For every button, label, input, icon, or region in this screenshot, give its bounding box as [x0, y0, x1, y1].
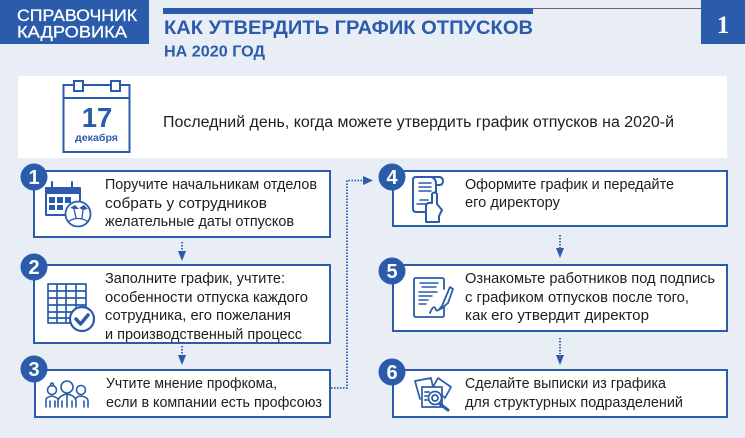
icon: calendar 17 December: декабря: [75, 132, 118, 144]
arrow 4 to 5: [556, 235, 564, 258]
brand block: КАДРОВИКА: [17, 22, 128, 42]
brand block: СПРАВОЧНИК: [17, 6, 137, 25]
step 6: [378, 358, 727, 417]
page number: [701, 0, 745, 44]
number 6: [378, 358, 406, 386]
icon: document with pen: [414, 278, 453, 317]
number 5: [378, 258, 406, 284]
number 2: 2: [28, 257, 40, 279]
step 5 text: как его утвердит директор: [465, 308, 649, 324]
title rule: [163, 8, 701, 14]
step 3 text: Учтите мнение профкома,: [106, 376, 277, 392]
number 4: 4: [386, 167, 398, 189]
step 1 text: собрать у сотрудников: [105, 196, 267, 212]
icon: documents with magnifier: [415, 378, 451, 410]
step 1 text: желательные даты отпусков: [105, 214, 294, 230]
step 1 text: [105, 177, 317, 230]
step 1 text: Поручите начальникам отделов: [105, 177, 317, 193]
arrow 5 to 6: [556, 338, 564, 365]
step 3: [20, 356, 330, 417]
step 4: [378, 164, 727, 226]
icon: calendar with island: [45, 182, 90, 226]
icon: calendar 17 December: 17: [82, 102, 112, 133]
step 5: [378, 258, 727, 331]
step 5 text: Ознакомьте работников под подпись: [465, 271, 715, 287]
number 3: 3: [28, 359, 40, 381]
icon: three people: [46, 381, 88, 407]
number 4: [378, 164, 406, 190]
panel: deadline: [18, 76, 727, 158]
icon: table with check: [48, 284, 94, 331]
title: НА 2020 ГОД: [164, 44, 266, 60]
number 2: [20, 254, 48, 280]
step 1: [20, 164, 330, 237]
title: КАК УТВЕРДИТЬ ГРАФИК ОТПУСКОВ: [164, 17, 533, 39]
arrow 2 to 3: [178, 346, 186, 365]
step 4 text: Оформите график и передайте: [465, 177, 674, 193]
number 5: 5: [386, 261, 398, 283]
step 5 text: [465, 271, 715, 324]
step 6 text: [465, 376, 683, 411]
page number: 1: [717, 12, 729, 39]
step 3 text: [106, 376, 322, 411]
step 5 text: с графиком отпусков после того,: [465, 290, 689, 306]
title: [164, 17, 533, 60]
number 1: 1: [28, 167, 40, 189]
brand block: [0, 0, 149, 44]
number 6: 6: [386, 362, 398, 384]
step 2 text: особенности отпуска каждого: [105, 290, 308, 306]
step 2 text: сотрудника, его пожелания: [105, 308, 291, 324]
step 2: [20, 254, 330, 343]
step 2 text: и производственный процесс: [105, 327, 302, 343]
step 6 text: для структурных подразделений: [465, 395, 683, 411]
step 2 text: [105, 271, 308, 343]
icon: calendar 17 December: [64, 81, 130, 152]
step 4 text: его директору: [465, 195, 561, 211]
step 4 text: [465, 177, 674, 211]
arrow 1 to 2: [178, 242, 186, 261]
step 2 text: Заполните график, учтите:: [105, 271, 285, 287]
number 3: [20, 356, 48, 382]
step 6 text: Сделайте выписки из графика: [465, 376, 667, 392]
deadline text: Последний день, когда можете утвердить график отпусков на 2020-й: [163, 114, 674, 131]
icon: document in hand: [413, 177, 443, 222]
arrow 3 to 4: [331, 176, 373, 388]
number 1: [20, 164, 48, 190]
step 3 text: если в компании есть профсоюз: [106, 395, 322, 411]
